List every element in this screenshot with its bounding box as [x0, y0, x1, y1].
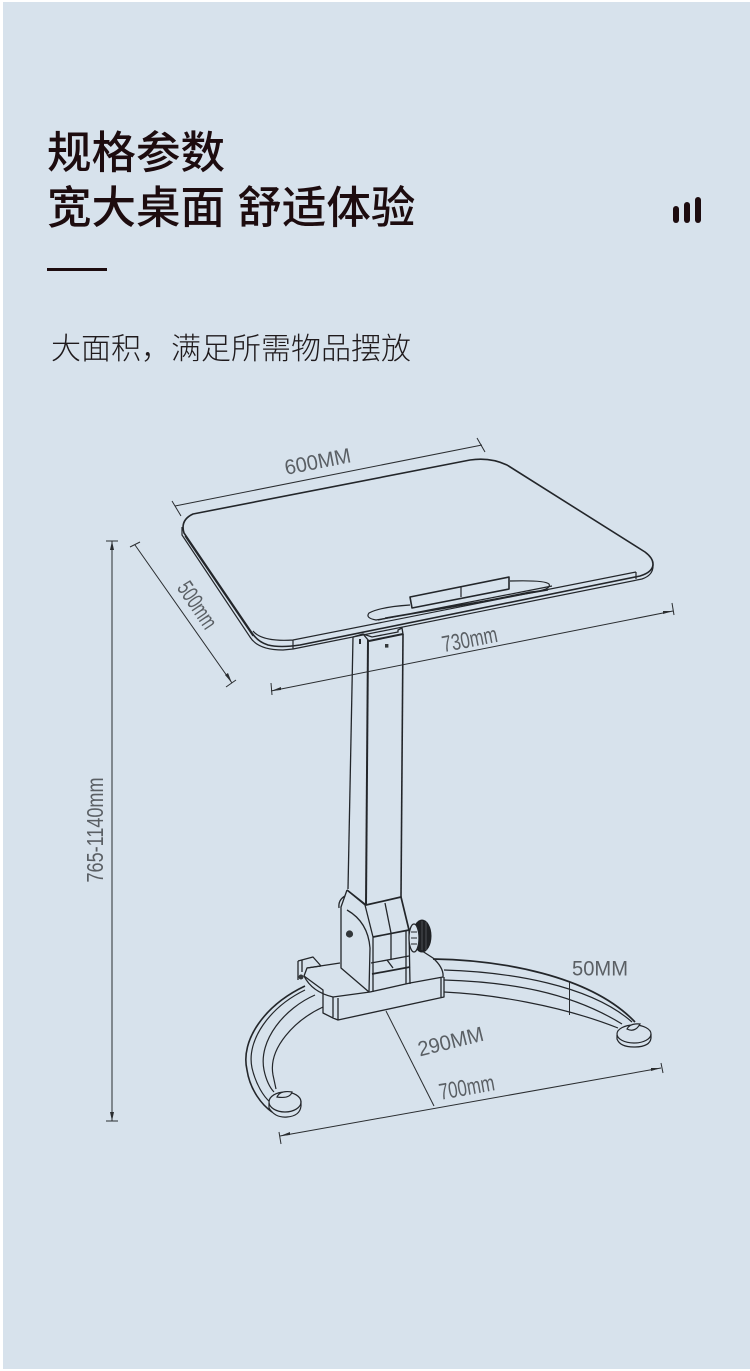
- adjustment knob: [412, 920, 432, 952]
- dimension lines: [106, 438, 674, 1144]
- base plate: [304, 949, 443, 997]
- left arm and foot: [246, 986, 323, 1117]
- label: 290MM: 290MM: [415, 1023, 486, 1061]
- clip on desk edge: [410, 577, 509, 608]
- label: 730mm: 730mm: [440, 621, 500, 657]
- label: 765-1140mm: 765-1140mm: [82, 778, 108, 882]
- right arm and foot: [433, 959, 651, 1047]
- desk top: [182, 459, 653, 650]
- heading rule: [47, 268, 107, 271]
- label: 600MM: 600MM: [283, 444, 353, 480]
- title: [47, 129, 415, 233]
- icon: signal bars: [673, 197, 701, 223]
- label: 50MM: 50MM: [572, 958, 628, 981]
- subtitle: 大面积，满足所需物品摆放: [51, 333, 411, 366]
- label: 700mm: 700mm: [437, 1069, 496, 1105]
- label: 500mm: 500mm: [172, 576, 223, 634]
- title: 规格参数: [47, 129, 225, 178]
- dimension arrowheads: [110, 541, 673, 1136]
- title: 宽大桌面 舒适体验: [47, 184, 415, 233]
- bracket and base: [298, 890, 444, 1020]
- column: [348, 628, 403, 904]
